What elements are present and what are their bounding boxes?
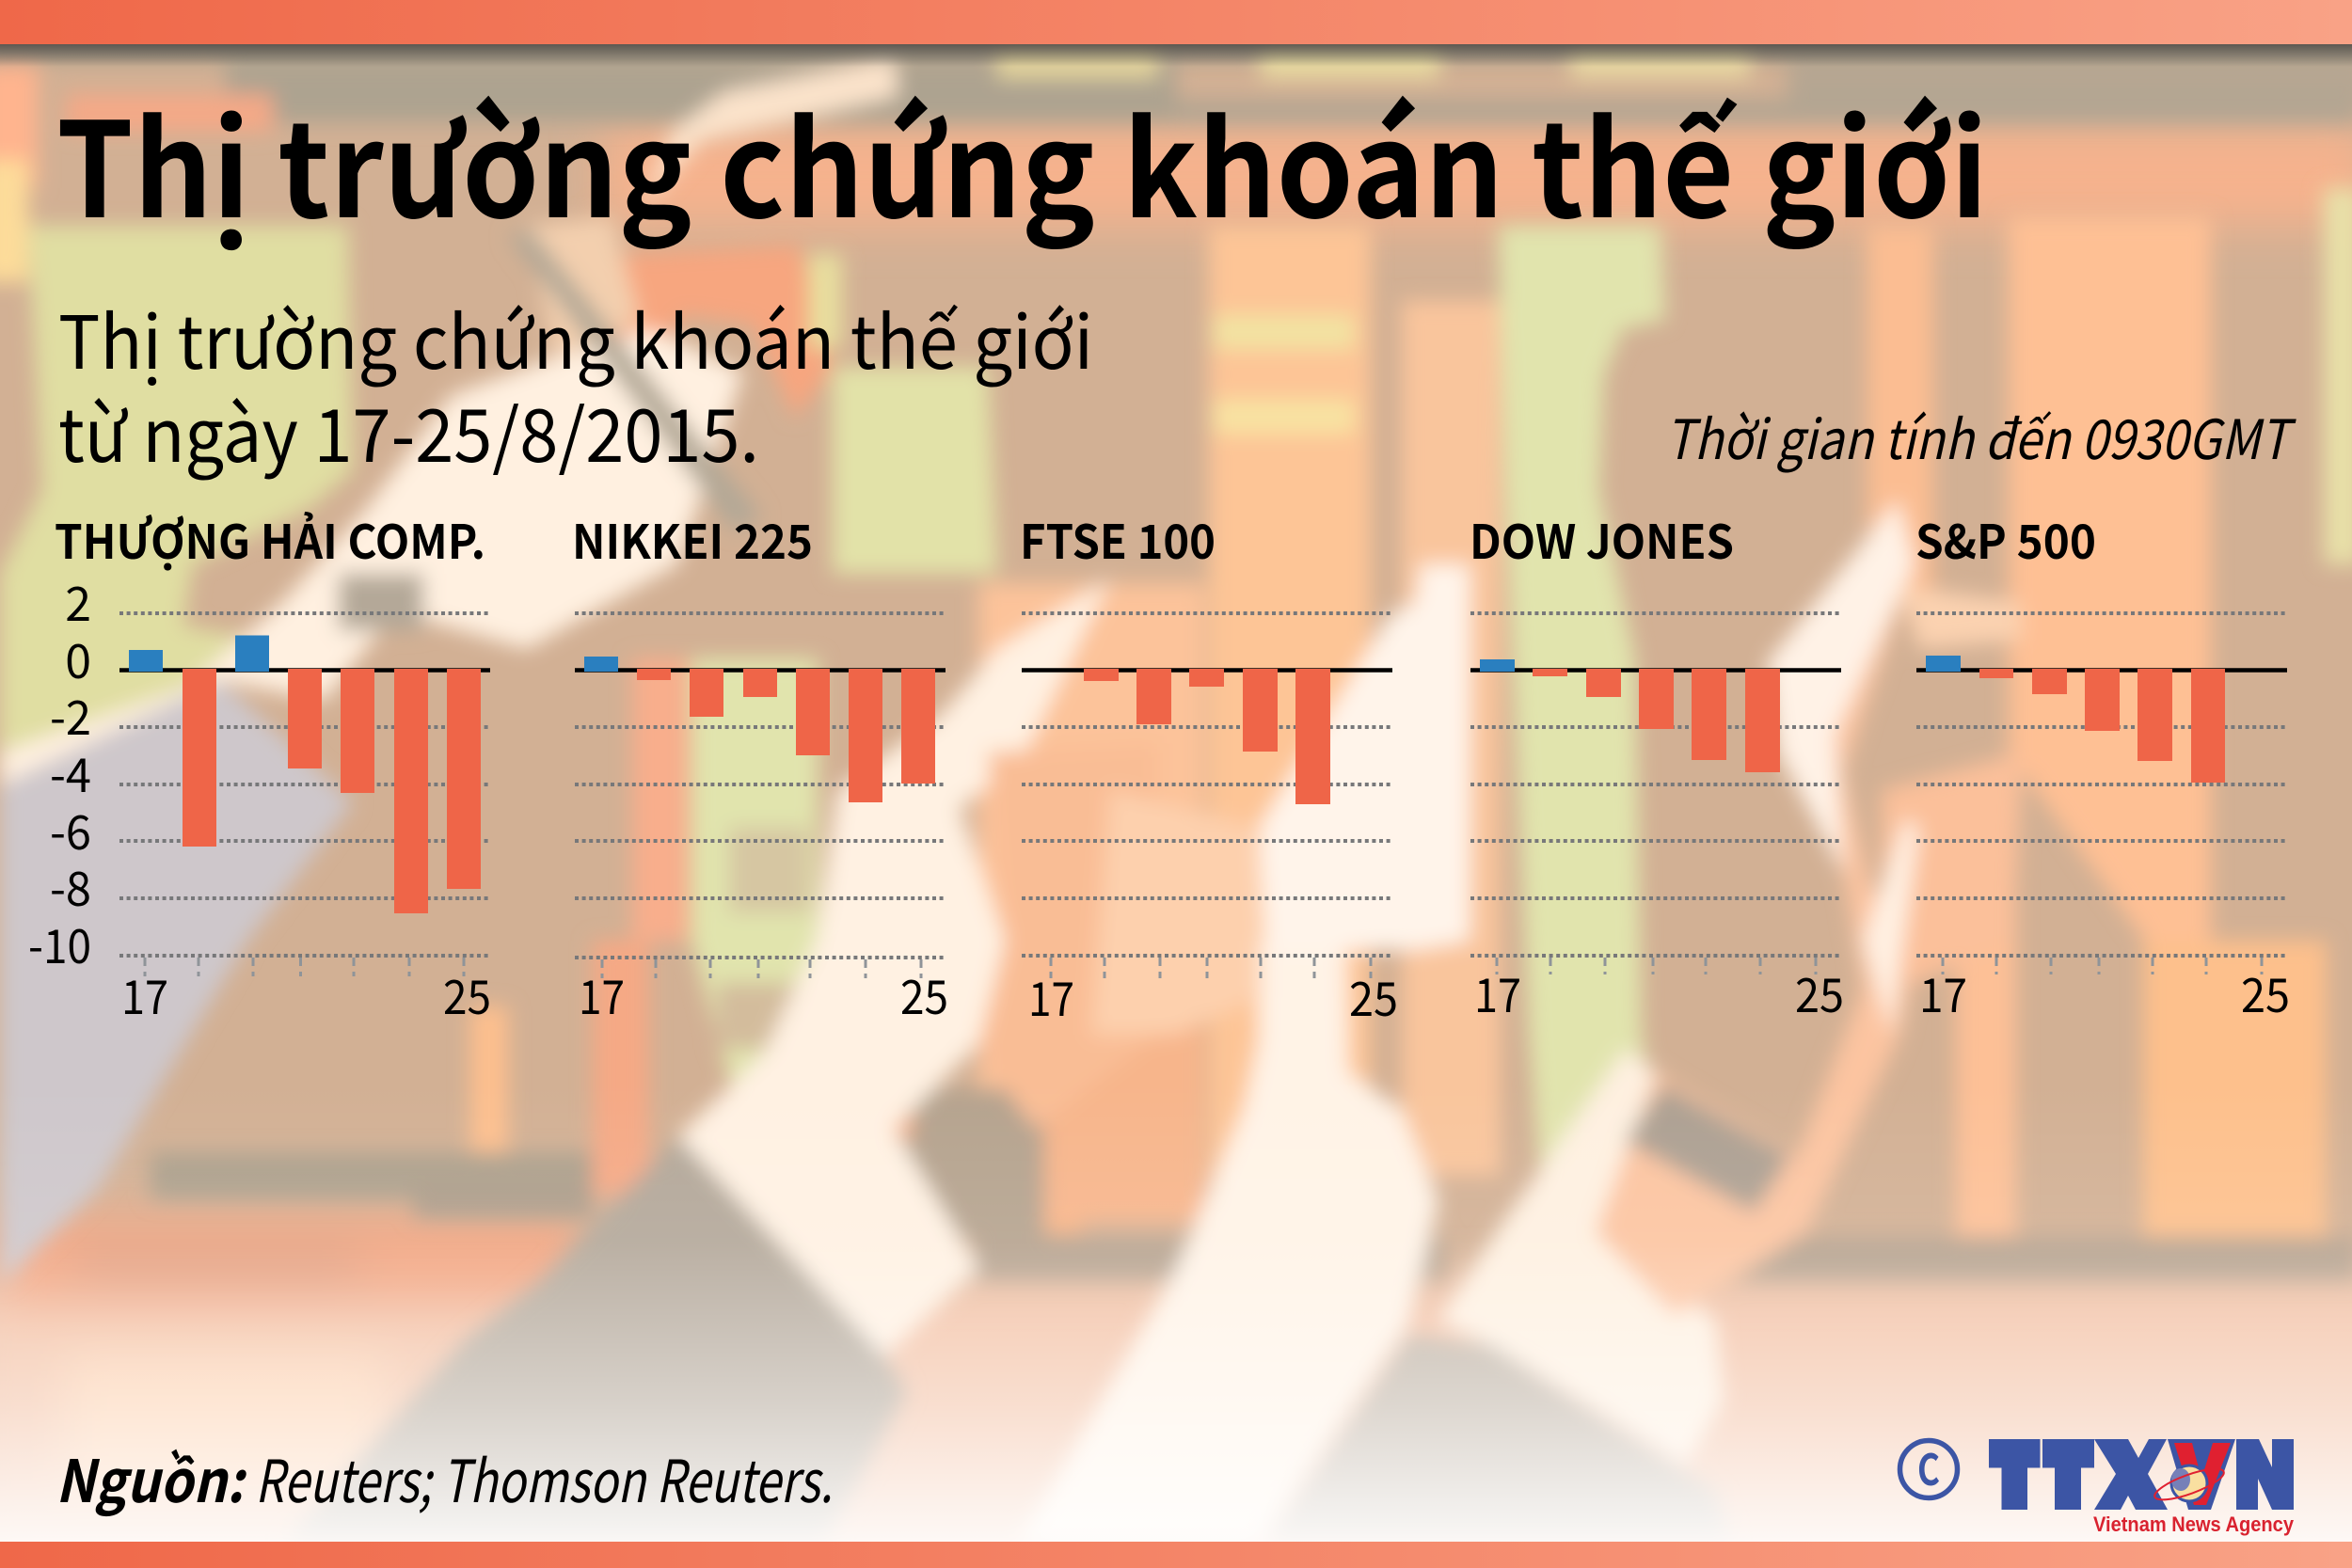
suit 2 — [285, 1136, 907, 1543]
bars — [129, 636, 481, 913]
subtitle: Thị trường chứng khoán thế giới — [58, 285, 1093, 390]
bottom banner — [0, 1542, 2352, 1568]
hand 3 — [1596, 499, 1938, 1317]
pen — [508, 230, 762, 531]
y axis labels: -10 — [28, 910, 91, 977]
chart: Thượng Hải Comp — [55, 505, 491, 1028]
chart: Nikkei 225: 17 — [579, 960, 625, 1028]
y axis labels: -6 — [50, 796, 91, 863]
hand 2 — [678, 578, 1110, 1356]
y axis labels: 0 — [65, 625, 91, 692]
source — [56, 1434, 833, 1519]
suit 3 — [1266, 1336, 1731, 1543]
chart: S&P 500: 17 — [1919, 958, 1967, 1026]
logo: TTXVN — [1989, 1439, 2295, 1536]
y axis labels — [28, 567, 91, 977]
y axis labels: -4 — [50, 738, 91, 806]
sleeve 3 — [1020, 941, 1438, 1543]
chart: Thượng Hải Comp: 25 — [443, 960, 491, 1028]
title: Thị trường chứng khoán thế giới — [56, 66, 1988, 256]
chart: Dow Jones: 25 — [1795, 958, 1844, 1026]
copyright mark — [1900, 1436, 1957, 1498]
banner shadow — [0, 44, 2352, 67]
y axis labels: 2 — [65, 567, 91, 635]
subtitle: từ ngày 17-25/8/2015. — [58, 378, 759, 483]
chart: Dow Jones: 17 — [1474, 958, 1521, 1026]
heading: THƯỢNG HẢI COMP. — [55, 505, 485, 573]
logo: TTXVN: Vietnam News Agency — [2093, 1513, 2295, 1536]
chart: FTSE 100: 25 — [1349, 962, 1398, 1030]
source: Reuters; Thomson Reuters. — [255, 1434, 833, 1519]
board columns right — [1209, 226, 1371, 1185]
copyright mark: C — [1917, 1436, 1940, 1498]
heading: S&P 500 — [1915, 505, 2096, 573]
bars — [1480, 659, 1780, 772]
bars — [1084, 669, 1330, 804]
heading: DOW JONES — [1470, 505, 1734, 573]
top banner — [0, 0, 2352, 44]
subtitle — [58, 285, 1093, 483]
bars — [1926, 656, 2225, 783]
heading: NIKKEI 225 — [572, 505, 813, 573]
source: Nguồn: — [56, 1434, 246, 1519]
chart: FTSE 100: 17 — [1028, 962, 1074, 1030]
y axis labels: -8 — [50, 852, 91, 920]
chart: FTSE 100 — [1020, 505, 1398, 1030]
bars — [584, 657, 935, 802]
y axis labels: -2 — [50, 681, 91, 749]
chart: Nikkei 225 — [572, 505, 948, 1028]
left board — [0, 226, 353, 752]
heading: FTSE 100 — [1020, 505, 1216, 573]
person 1 — [0, 680, 353, 1285]
chart: S&P 500: 25 — [2241, 958, 2290, 1026]
chart: S&P 500 — [1915, 505, 2290, 1026]
chart: Thượng Hải Comp: 17 — [121, 960, 168, 1028]
chart: Dow Jones — [1470, 505, 1844, 1026]
orange hand at top — [602, 245, 833, 419]
finger at top — [640, 58, 898, 212]
time note: Thời gian tính đến 0930GMT — [1665, 396, 2296, 475]
chart: Nikkei 225: 25 — [900, 960, 948, 1028]
